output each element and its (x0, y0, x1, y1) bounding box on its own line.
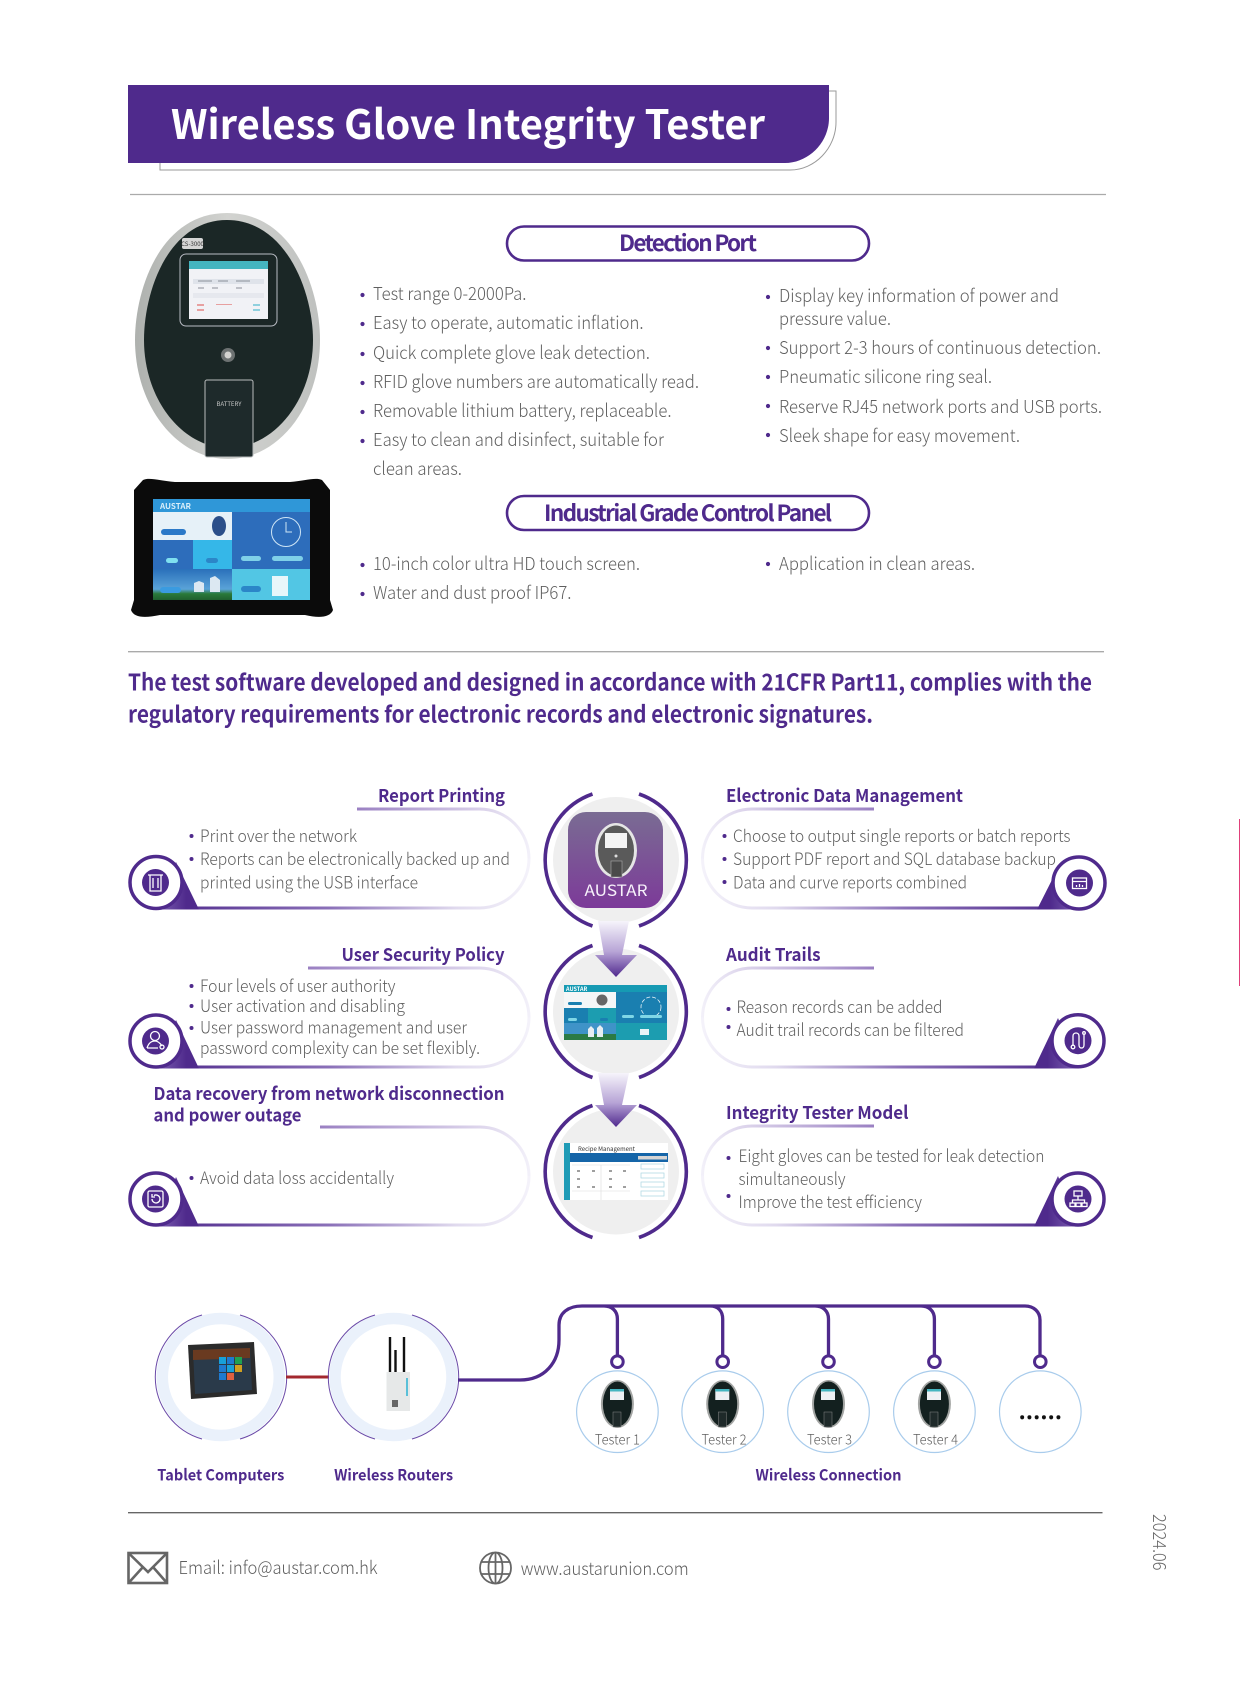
panel: detection port (360, 226, 1102, 481)
feature list: left column (360, 280, 699, 481)
card: data recovery (130, 1080, 529, 1226)
heading: User Security Policy (342, 941, 504, 967)
heading pill: control panel: Industrial Grade Control Panel (544, 496, 832, 528)
card text: Choose to output single reports or batch reports (733, 822, 1071, 847)
control panel features: Water and dust proof IP67. (373, 579, 572, 605)
circle 1: Austar logo: AUSTAR (584, 879, 648, 901)
card text: Avoid data loss accidentally (200, 1164, 395, 1189)
heading: Report Printing (378, 782, 505, 808)
card text: Four levels of user authority (200, 972, 396, 997)
contact: email (128, 1553, 378, 1583)
arrow: logo to home screen (595, 921, 637, 977)
software compliance statement (128, 664, 1092, 730)
panel: industrial grade control panel (360, 496, 975, 605)
product photo: detection port device: BATTERY (217, 399, 242, 408)
card text: Improve the test efficiency (738, 1188, 923, 1213)
heading (154, 1080, 504, 1128)
tester 2 node (682, 1356, 764, 1452)
circle 2: software home screen: AUSTAR (565, 985, 588, 993)
card: electronic data management (702, 782, 1105, 910)
circle 1: Austar logo (545, 794, 686, 926)
heading: Electronic Data Management (726, 782, 963, 808)
card: user security policy (130, 941, 529, 1068)
heading: Integrity Tester Model (726, 1099, 909, 1125)
icon: globe (480, 1552, 511, 1584)
feature list: right column: Reserve RJ45 network ports and USB ports. (779, 393, 1102, 419)
feature list: left column: Easy to clean and disinfect, suitable for (373, 426, 664, 452)
product photo: control panel tablet: AUSTAR (159, 501, 191, 512)
label: tablet computers: Tablet Computers (157, 1464, 285, 1486)
tester 3 node: Tester 3 (807, 1430, 852, 1450)
heading: Audit Trails (725, 941, 821, 967)
card text (722, 822, 1071, 894)
email text: Email: info@austar.com.hk (178, 1554, 378, 1580)
circle 3: software recipe screen (545, 1106, 686, 1238)
feature list: left column: Quick complete glove leak detection. (373, 339, 650, 365)
feature list: right column: Pneumatic silicone ring seal. (779, 363, 992, 389)
feature list: right column (766, 282, 1102, 448)
card text: Audit trail records can be filtered (736, 1016, 964, 1041)
card text: User password management and user (200, 1014, 468, 1038)
card text (190, 972, 480, 1059)
icon: data window (1037, 857, 1105, 910)
tester 2 node: Tester 2 (702, 1430, 746, 1450)
card text (726, 1142, 1044, 1213)
card text: Reason records can be added (736, 993, 942, 1018)
website text: www.austarunion.com (521, 1555, 689, 1581)
product photo: control panel tablet (131, 479, 333, 617)
additional testers node (1000, 1356, 1081, 1452)
control panel features (360, 550, 975, 605)
circle 2: software home screen (545, 946, 686, 1078)
feature list: left column: Removable lithium battery, replaceable. (373, 397, 672, 423)
card: audit trails (702, 941, 1104, 1068)
label: wireless connection: Wireless Connection (756, 1464, 902, 1486)
link: tablet to router (286, 1376, 329, 1378)
card text: Support PDF report and SQL database backup (733, 845, 1056, 870)
feature list: right column: pressure value. (779, 305, 891, 331)
software compliance statement: regulatory requirements for electronic records and electronic signatures. (128, 696, 873, 730)
tester 1 node: Tester 1 (595, 1430, 640, 1450)
control panel features: Application in clean areas. (779, 550, 975, 576)
icon: user (130, 1015, 199, 1068)
arrow: home screen to recipe screen (595, 1073, 637, 1127)
network diagram (155, 1306, 1081, 1486)
wireless connection lines (458, 1306, 1040, 1380)
feature list: right column: Display key information of power and (779, 282, 1059, 308)
contact: website (480, 1552, 689, 1584)
card: report printing (130, 782, 529, 910)
feature list: left column: clean areas. (373, 455, 462, 481)
card text (190, 822, 510, 894)
feature list: left column: Easy to operate, automatic inflation. (373, 309, 644, 335)
feature list: left column: RFID glove numbers are automatically read. (373, 368, 699, 394)
feature list: left column: Test range 0-2000Pa. (373, 280, 526, 306)
title banner (128, 85, 836, 170)
heading: Data recovery from network disconnection (154, 1080, 504, 1106)
card text: simultaneously (738, 1165, 846, 1190)
card text: Eight gloves can be tested for leak detection (738, 1142, 1044, 1167)
card text: Data and curve reports combined (733, 868, 967, 894)
icon: data restore (130, 1173, 199, 1226)
card: integrity tester model (702, 1099, 1104, 1226)
software compliance statement: The test software developed and designed in accordance with 21CFR Part11, complies with the (128, 664, 1092, 698)
card text (726, 993, 964, 1041)
icon: envelope (128, 1553, 167, 1583)
additional testers node: ...... (1019, 1399, 1061, 1425)
feature list: right column: Support 2-3 hours of continuous detection. (779, 334, 1101, 360)
title: Wireless Glove Integrity Tester (171, 92, 765, 151)
tester 4 node (894, 1356, 975, 1452)
heading pill: detection port: Detection Port (619, 226, 758, 258)
print date: 2024.06 (1147, 1514, 1173, 1570)
product photo: detection port device: CS-3000 (181, 239, 205, 248)
tester 3 node (788, 1356, 869, 1452)
heading pill: detection port (507, 226, 869, 260)
wireless routers node (328, 1315, 459, 1439)
centre flow circles (545, 794, 686, 1238)
card text: password complexity can be set flexibly. (200, 1034, 480, 1059)
heading: and power outage (154, 1102, 302, 1128)
icon: printer (130, 856, 199, 910)
tester 1 node (577, 1356, 658, 1452)
control panel features: 10-inch color ultra HD touch screen. (373, 550, 640, 576)
tester 4 node: Tester 4 (913, 1430, 958, 1450)
icon: audit trail (1034, 1015, 1104, 1068)
feature list: right column: Sleek shape for easy movement. (779, 422, 1020, 448)
icon: network (1034, 1173, 1104, 1226)
product photo: detection port device (135, 213, 320, 459)
card text: printed using the USB interface (200, 868, 418, 894)
tablet computers node (155, 1315, 287, 1439)
card text: User activation and disabling (200, 992, 406, 1017)
card text: Reports can be electronically backed up and (200, 845, 510, 870)
circle 3: software recipe screen: Recipe Management (578, 1144, 636, 1153)
label: wireless routers: Wireless Routers (334, 1464, 453, 1486)
card text: Print over the network (200, 822, 357, 847)
